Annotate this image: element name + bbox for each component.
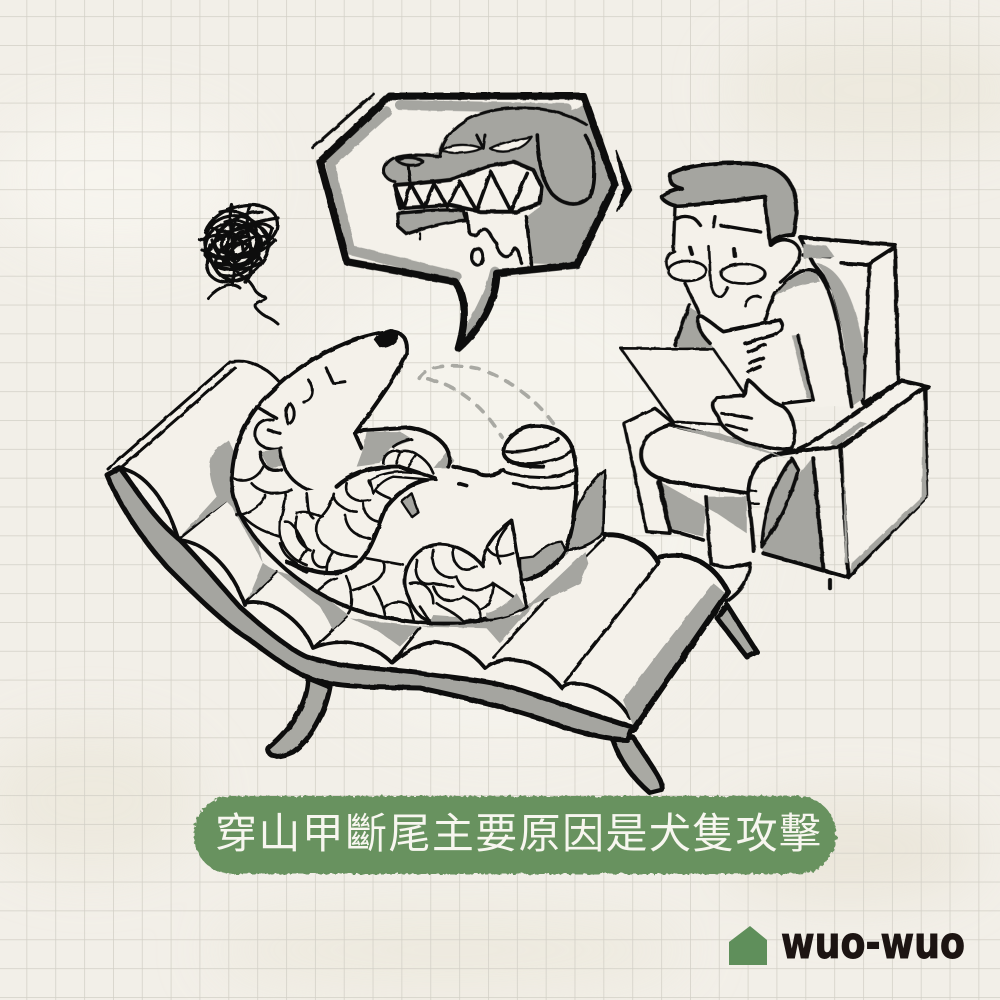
thigh [641,425,797,493]
small claw [402,493,418,517]
jacket outline [675,270,852,407]
dog mouth [395,162,542,212]
armrest top [792,381,928,452]
logo [729,918,965,969]
belly dot [458,483,467,486]
lower hand [713,380,794,449]
footrest outline [605,535,728,730]
footrest shadow [623,583,725,725]
dashed motion arcs [419,366,553,437]
chaise legs [268,605,757,793]
lapel line [783,335,813,403]
armchair back [800,237,898,403]
sheet shadow [672,427,787,458]
chaise scallops [120,468,630,718]
banner pill [194,796,836,874]
tail rings [505,438,575,488]
foreleg outline [287,467,435,573]
drip [416,233,423,239]
dog ear [537,135,594,204]
chaise frame strip [107,468,632,740]
bubble outline [320,96,615,348]
logo house icon [729,926,767,965]
re-applied gray on chest [357,432,413,467]
eyebrows [676,216,761,232]
pangolin [232,331,605,624]
cast shadows chest [343,430,413,467]
tail base [520,542,565,581]
trouser shadow [660,482,747,537]
arm tip [370,472,437,493]
bubble fill [320,96,615,348]
cast shadows right [420,537,588,643]
footrest crease [565,565,657,682]
back scales [233,467,307,565]
lapel [792,334,813,398]
chin hand [697,316,782,372]
jacket shadow [674,269,820,348]
armrest front [841,387,927,577]
hair [662,163,797,245]
bubble inner shadow [330,105,567,333]
logo wordmark: wuo-wuo [781,918,965,969]
pangolin face marks [255,368,345,449]
hind leg scales [410,523,513,622]
speech bubble with dog [313,94,632,348]
foreleg scales [285,480,390,573]
crossed shin [762,458,798,547]
drool drop [472,248,483,265]
knee fold [748,490,758,503]
lower leg outlines [660,482,754,602]
chaise longue [107,361,757,793]
ear [772,240,800,282]
shade near claw [433,452,454,468]
left arm of chair [624,408,673,533]
chair shadow [803,244,863,407]
lower belly scales [317,558,413,620]
dog head [384,100,615,265]
armchair inner lines [803,247,895,398]
emphasis chevron [616,150,632,212]
chaise creases [180,500,605,663]
chaise back edge [108,361,282,472]
left ear stub [666,252,675,273]
leg under [660,482,757,567]
dog lower jaw [397,210,467,234]
claws [370,439,527,622]
armchair lower shadow [760,457,823,570]
foreleg fill [282,467,433,573]
dog teeth [395,172,527,211]
pangolin body [232,331,576,624]
ear shade [260,448,285,470]
tail fin [565,470,605,550]
paper sheet [621,348,747,427]
chaise cushion base [107,361,728,740]
drool and neck [467,213,532,265]
torso [675,271,850,407]
footrest edge redraw [633,592,728,730]
pangolin chest line [257,407,340,493]
pangolin scales [233,467,435,620]
dog brow and snout outline [384,108,587,182]
pangolin outline [232,331,576,624]
illustration [107,94,928,793]
head [673,197,800,332]
glasses [668,261,765,284]
hind leg [405,520,527,622]
nose and mouth [709,247,761,306]
face outline [673,207,775,320]
dog eyes [442,137,532,153]
hind leg shade [430,593,525,622]
psychologist in armchair [621,163,928,602]
fingers [722,413,752,430]
chin hand outline [698,316,782,372]
belly scales [287,562,307,572]
scribble: tangled thoughts [200,205,278,324]
chair base [763,458,848,588]
pangolin nose [375,332,398,347]
eyes [690,247,735,256]
emphasis line [313,94,373,148]
caption banner [194,796,836,874]
cast shadows left [182,440,420,647]
armrest shadows [830,395,927,573]
caption text: 穿山甲斷尾主要原因是犬隻攻擊 [215,800,821,861]
